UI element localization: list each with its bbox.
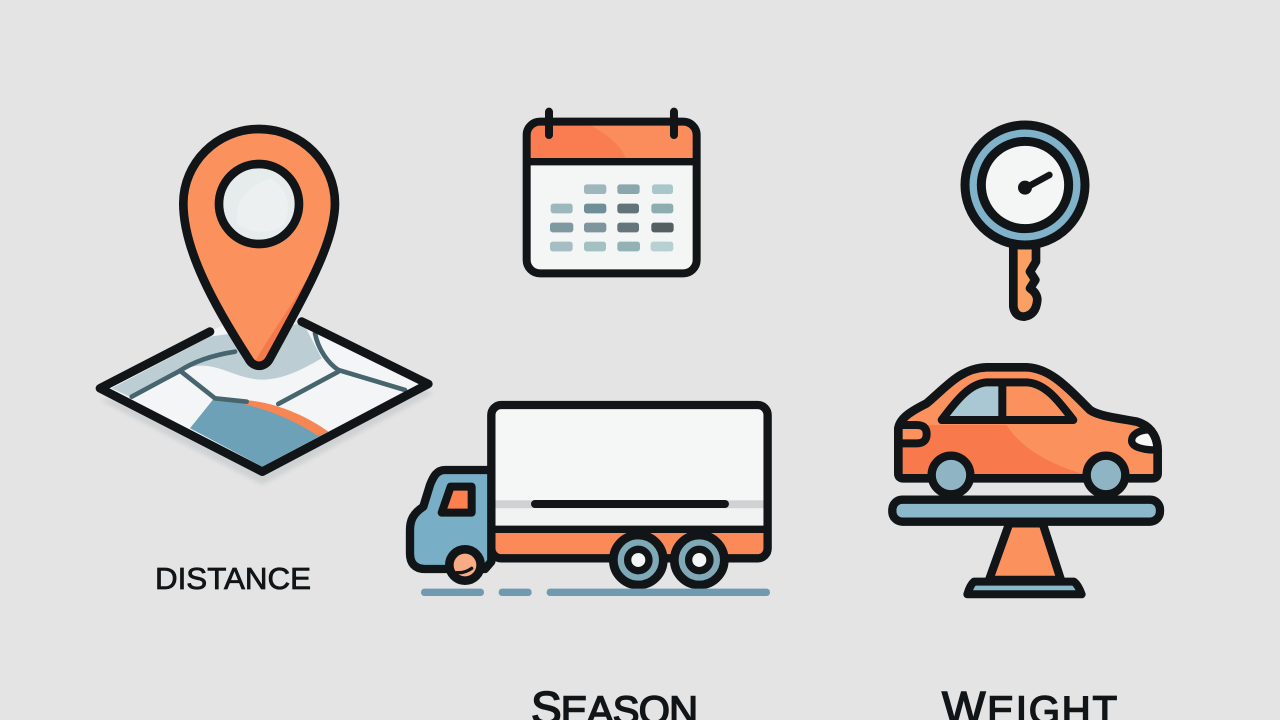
icon: delivery truck [410,405,770,596]
icon: gauge with key [965,125,1085,317]
icon: car on balance scale [892,367,1160,594]
icon: calendar [527,112,697,273]
location pin [183,129,335,366]
scale base [967,582,1082,594]
label: distance: DISTANCE [155,561,311,596]
rear wheels [613,535,724,585]
folded map [100,307,428,472]
car body [898,367,1158,478]
icon: map with location pin [100,129,433,485]
calendar date cells [550,184,674,251]
gauge dial [965,125,1085,245]
scale beam [892,500,1160,522]
key shaft [1013,245,1037,317]
scale pedestal [989,523,1061,580]
front wheel [449,549,481,581]
truck cab [410,470,491,569]
map shadow [100,370,433,485]
truck cargo box [491,405,768,558]
road dashes [421,589,770,596]
car wheels [932,456,1125,494]
